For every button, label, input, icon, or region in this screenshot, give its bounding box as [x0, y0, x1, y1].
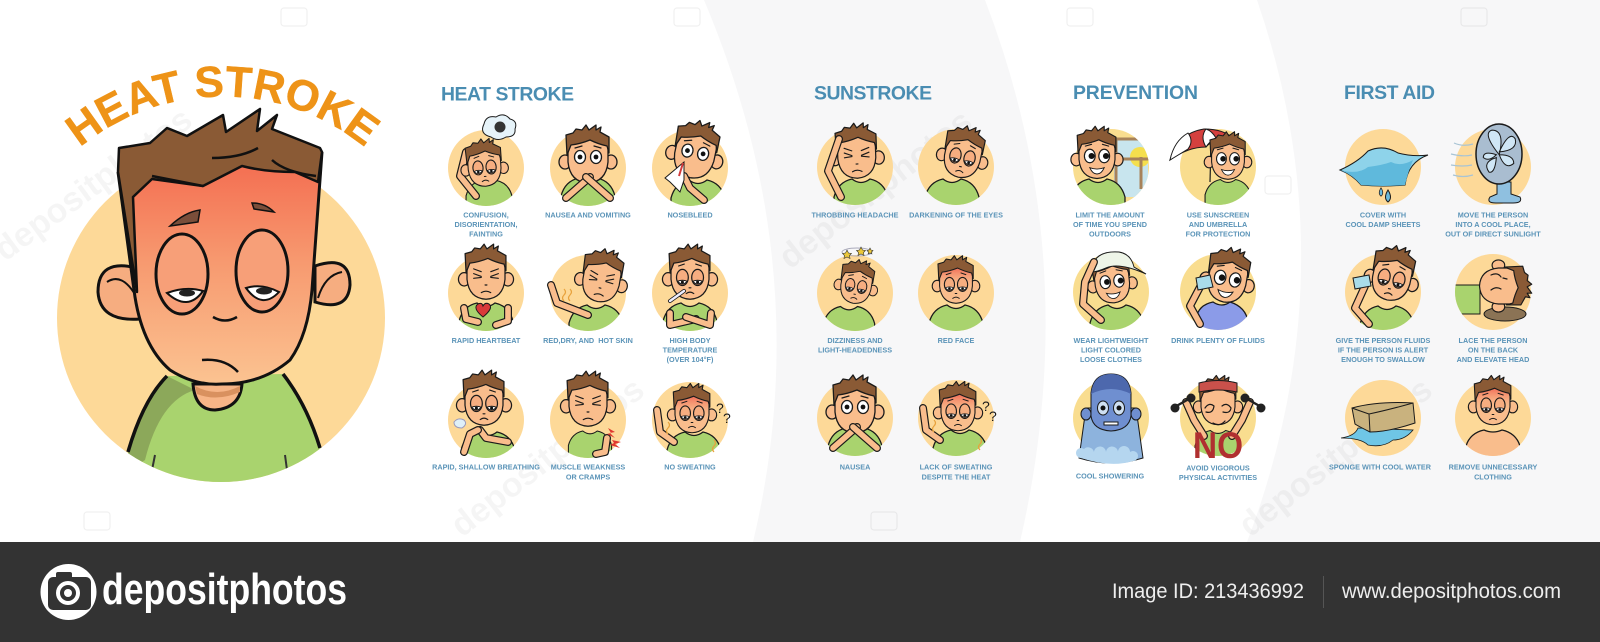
caption: cool damp sheets: COVER WITH: [1360, 210, 1406, 220]
icon: drink fluids: [1180, 246, 1256, 330]
icon: nosebleed: [652, 120, 728, 206]
caption: lay on back: ON THE BACK: [1468, 346, 1519, 355]
caption: lightweight clothes: LIGHT COLORED: [1081, 346, 1141, 355]
caption: lack of sweating: LACK OF SWEATING: [920, 463, 992, 472]
footer bar: [0, 542, 1600, 642]
caption: dizziness: DIZZINESS AND: [827, 336, 883, 345]
heading: first aid: FIRST AID: [1344, 82, 1435, 104]
caption: lightweight clothes: LOOSE CLOTHES: [1080, 355, 1142, 364]
icon: limit time outdoors: [1070, 126, 1149, 205]
caption: sponge with cool water: SPONGE WITH COOL WATER: [1329, 463, 1432, 472]
icon: rapid heartbeat: [448, 244, 524, 339]
caption: high body temperature: TEMPERATURE: [663, 346, 717, 355]
caption: move to cool place: MOVE THE PERSON: [1458, 210, 1528, 220]
caption: cool showering: COOL SHOWERING: [1076, 472, 1145, 480]
caption: nausea: NAUSEA: [840, 463, 871, 472]
heading: prevention: PREVENTION: [1073, 82, 1198, 104]
icon: dizziness: [817, 247, 893, 341]
caption: nosebleed: NOSEBLEED: [667, 210, 713, 220]
watermark: depositphotos: [772, 102, 979, 276]
icon: cool damp sheets: [1340, 129, 1428, 205]
icon: throbbing headache: [817, 122, 893, 205]
caption: limit time: LIMIT THE AMOUNT: [1076, 210, 1144, 220]
caption: lay on back: AND ELEVATE HEAD: [1457, 355, 1529, 364]
panel: heat stroke symptoms: [432, 84, 731, 481]
caption: cool damp sheets: COOL DAMP SHEETS: [1345, 220, 1421, 229]
caption: red face: RED FACE: [938, 336, 974, 345]
icon: rapid shallow breathing: [448, 370, 524, 468]
caption: limit time: OF TIME YOU SPEND: [1073, 220, 1147, 229]
icon: muscle weakness: [550, 371, 626, 460]
image id: Image ID: 213436992: [1112, 580, 1304, 603]
caption: sunscreen: AND UMBRELLA: [1189, 220, 1248, 229]
icon: cool showering: [1073, 374, 1149, 464]
caption: confusion: FAINTING: [469, 230, 503, 239]
heading: sunstroke: SUNSTROKE: [814, 82, 932, 104]
caption: give fluids: ENOUGH TO SWALLOW: [1341, 355, 1425, 364]
watermark: depositphotos: [444, 370, 651, 544]
icon: sunscreen and umbrella: [1170, 129, 1256, 210]
icon: sponge with cool water: [1341, 380, 1421, 456]
icon: lack of sweating: [918, 380, 997, 466]
icon: high body temperature: [652, 244, 728, 339]
caption: avoid vigorous activities: PHYSICAL ACTIVITIES: [1179, 473, 1257, 482]
main character: [57, 109, 385, 500]
icon: give fluids: [1345, 245, 1421, 330]
caption: sunscreen: FOR PROTECTION: [1186, 230, 1250, 239]
caption: no sweating: NO SWEATING: [664, 463, 716, 472]
icon: no sweating: [652, 382, 731, 468]
caption: sunscreen: USE SUNSCREEN: [1187, 210, 1249, 220]
icon: avoid vigorous activities: NO: [1193, 425, 1243, 466]
icon: lightweight clothes: [1073, 251, 1149, 330]
footer logo: depositphotos: [102, 565, 347, 614]
caption: drink fluids: DRINK PLENTY OF FLUIDS: [1171, 336, 1265, 345]
caption: muscle weakness or cramps: MUSCLE WEAKNESS: [551, 463, 625, 472]
caption: give fluids: GIVE THE PERSON FLUIDS: [1336, 336, 1430, 345]
icon: lay on the back: [1448, 254, 1532, 330]
caption: nausea and vomiting: NAUSEA AND VOMITING: [545, 210, 631, 220]
icon: red face: [918, 255, 994, 331]
caption: limit time: OUTDOORS: [1089, 230, 1131, 239]
caption: rapid shallow breathing: RAPID, SHALLOW BREATHING: [432, 463, 540, 472]
icon: red dry hot skin: [546, 248, 628, 331]
panel: prevention: [1071, 82, 1266, 482]
caption: move to cool place: INTO A COOL PLACE,: [1455, 220, 1531, 229]
footer logo: [40, 564, 347, 620]
caption: give fluids: IF THE PERSON IS ALERT: [1338, 346, 1429, 355]
panel: sunstroke: [812, 82, 1003, 481]
caption: high body temperature: HIGH BODY: [669, 336, 711, 345]
icon: nausea and vomiting: [550, 125, 626, 214]
icon: darkening of the eyes: [918, 125, 994, 205]
caption: rapid heartbeat: RAPID HEARTBEAT: [452, 336, 521, 345]
caption: move to cool place: OUT OF DIRECT SUNLIGHT: [1445, 230, 1541, 239]
caption: avoid vigorous activities: AVOID VIGOROUS: [1186, 464, 1250, 472]
icon: nausea: [817, 375, 893, 464]
caption: remove clothing: REMOVE UNNECESSARY: [1449, 463, 1537, 472]
icon: avoid vigorous activities: [1170, 375, 1266, 466]
icon: cool place with fan: [1451, 124, 1531, 205]
caption: lay on back: LACE THE PERSON: [1459, 336, 1527, 345]
caption: red dry hot skin: RED,DRY, AND HOT SKIN: [543, 336, 633, 345]
panel: first aid: [1329, 82, 1541, 481]
icon: confusion: [448, 115, 524, 211]
caption: darkening of the eyes: DARKENING OF THE EYES: [909, 210, 1003, 220]
caption: lightweight clothes: WEAR LIGHTWEIGHT: [1074, 336, 1148, 345]
website url: www.depositphotos.com: [1341, 580, 1561, 603]
caption: muscle weakness or cramps: OR CRAMPS: [566, 472, 610, 481]
caption: throbbing headache: THROBBING HEADACHE: [812, 210, 899, 220]
caption: high body temperature: (OVER 104°F): [667, 355, 714, 364]
caption: lack of sweating: DESPITE THE HEAT: [922, 472, 991, 481]
caption: confusion: CONFUSION,: [463, 210, 509, 220]
caption: dizziness: LIGHT-HEADEDNESS: [818, 346, 892, 355]
watermark: [0, 8, 1487, 544]
main title: curved HEAT STROKE: HEAT STROKE: [64, 66, 381, 146]
icon: remove clothing: [1455, 375, 1531, 464]
caption: remove clothing: CLOTHING: [1474, 472, 1512, 481]
caption: confusion: DISORIENTATION,: [455, 220, 517, 229]
heading: heat stroke: HEAT STROKE: [441, 84, 574, 106]
watermark: depositphotos: [1232, 370, 1439, 544]
